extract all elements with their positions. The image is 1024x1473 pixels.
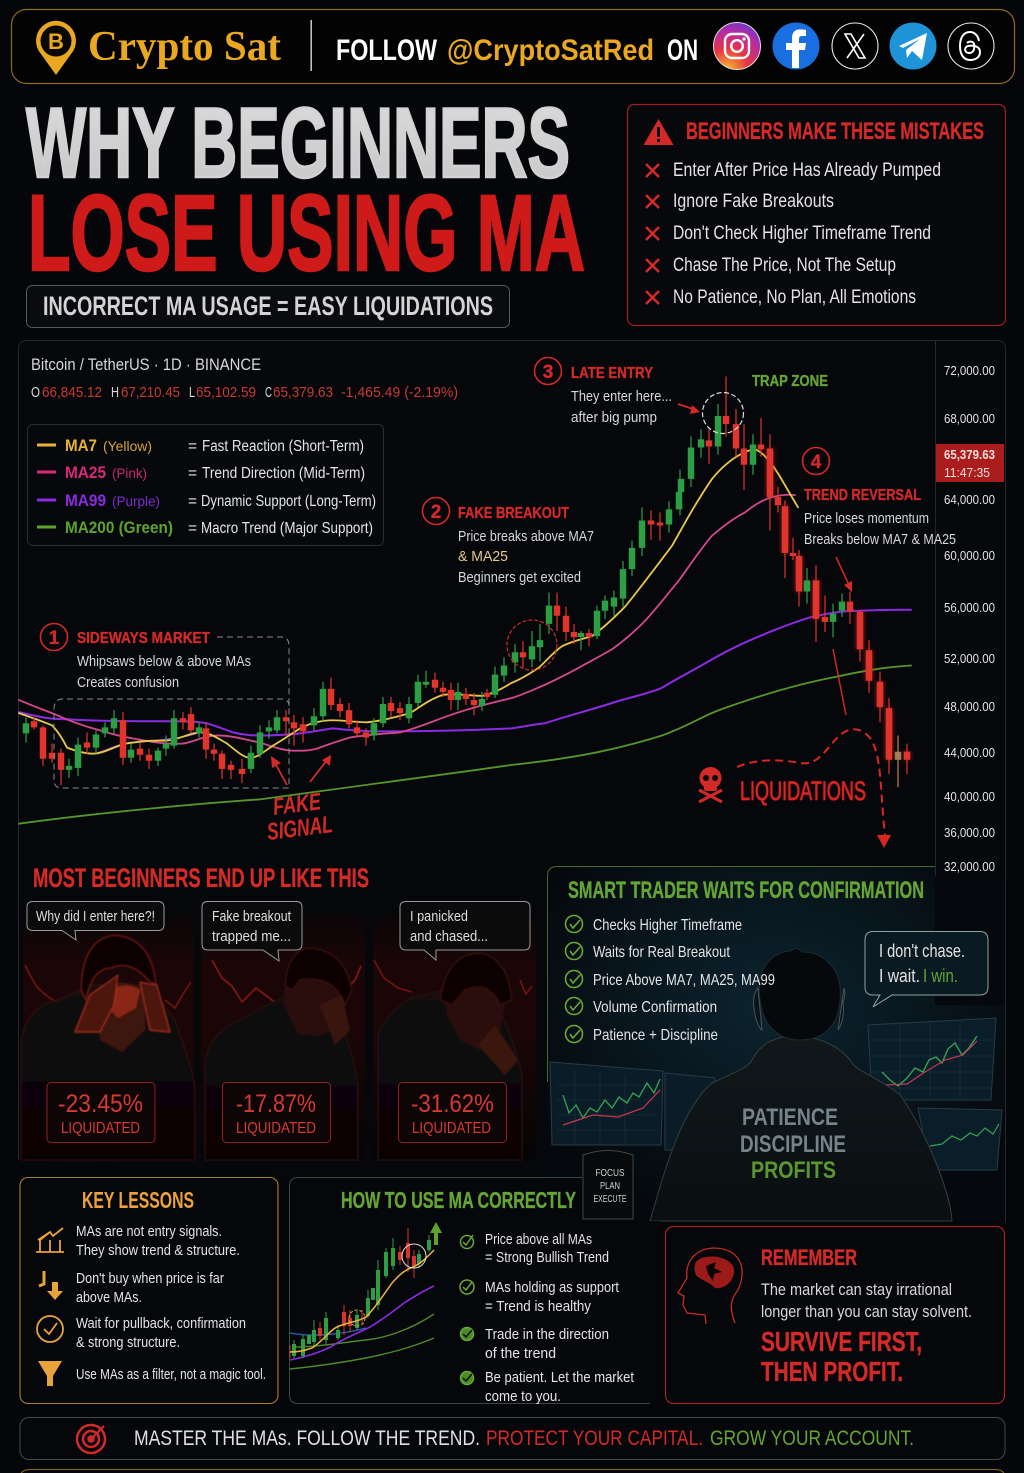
chart header: -1,465.49 (-2.19%) bbox=[341, 384, 458, 401]
arrow to entry bbox=[678, 404, 693, 409]
portrait 2 bbox=[201, 915, 365, 1160]
panel: how to use MA bbox=[290, 1178, 660, 1405]
how to checklist: Be patient. Let the market bbox=[485, 1370, 634, 1386]
arrow to breakdown bbox=[836, 557, 849, 585]
panel: price chart bbox=[18, 340, 1006, 1222]
lessons text: Don't buy when price is far bbox=[76, 1271, 224, 1287]
icon: skull bbox=[699, 767, 722, 802]
mug: FOCUS bbox=[596, 1167, 624, 1179]
annotation 4: trend reversal: TREND REVERSAL bbox=[804, 487, 921, 504]
legend: Trend Direction (Mid-Term) bbox=[202, 465, 365, 482]
annotation 4: trend reversal bbox=[802, 448, 956, 592]
icon: instagram bbox=[714, 22, 760, 70]
footer banner: PROTECT YOUR CAPITAL. bbox=[486, 1427, 703, 1450]
fake signal note with arrows: FAKE bbox=[271, 788, 323, 821]
icon: funnel bbox=[38, 1361, 62, 1386]
annotation 1: sideways market: Whipsaws below & above MAs bbox=[77, 653, 251, 670]
follow call to action: ON bbox=[667, 34, 698, 67]
annotation 2: fake breakout: 2 bbox=[431, 502, 441, 523]
legend: MA7 bbox=[65, 436, 97, 455]
speech bubble 2: trapped me... bbox=[212, 928, 291, 945]
mini uptrend chart bbox=[290, 1222, 442, 1369]
key lessons heading: KEY LESSONS bbox=[82, 1187, 194, 1213]
icon: head with brain bbox=[678, 1248, 742, 1324]
lessons text: They show trend & structure. bbox=[76, 1243, 240, 1259]
hoodie text: PATIENCE bbox=[742, 1104, 838, 1131]
icon: telegram bbox=[890, 22, 936, 70]
price axis: 64,000.00 bbox=[944, 492, 995, 507]
annotation 1: sideways market: SIDEWAYS MARKET bbox=[77, 630, 210, 647]
portrait 3 bbox=[373, 915, 536, 1160]
panel: remember: THEN PROFIT. bbox=[761, 1356, 903, 1387]
price axis: 48,000.00 bbox=[944, 699, 995, 714]
legend: = bbox=[188, 520, 197, 537]
confirmation checklist bbox=[566, 916, 775, 1044]
title: LOSE USING MA bbox=[28, 172, 585, 293]
lessons text: Use MAs as a filter, not a magic tool. bbox=[76, 1367, 266, 1383]
legend: Macro Trend (Major Support) bbox=[201, 520, 373, 537]
icon: growth chart bbox=[36, 1228, 64, 1252]
candlesticks bbox=[26, 377, 907, 787]
chart header: Bitcoin / TetherUS · 1D · BINANCE bbox=[31, 355, 261, 374]
how to checklist: = Strong Bullish Trend bbox=[485, 1250, 609, 1266]
footer banner: GROW YOUR ACCOUNT. bbox=[710, 1427, 914, 1450]
current price tag: 65,379.63 bbox=[944, 447, 995, 462]
hoodie text bbox=[740, 1104, 846, 1184]
loss badge 3: LIQUIDATED bbox=[412, 1120, 491, 1137]
how to checklist: of the trend bbox=[485, 1346, 556, 1362]
title bbox=[26, 87, 585, 293]
speech bubble: I don't chase: I don't chase. bbox=[879, 941, 965, 961]
price axis: 44,000.00 bbox=[944, 745, 995, 760]
left monitors bbox=[550, 1062, 715, 1150]
green candles bbox=[26, 404, 842, 778]
legend: = bbox=[188, 438, 197, 455]
speech bubble 1: Why did I enter here?! bbox=[36, 908, 155, 925]
follow call to action: @CryptoSatRed bbox=[447, 34, 654, 67]
annotation 4: trend reversal: 4 bbox=[811, 452, 822, 473]
chart header: 65,102.59 bbox=[196, 384, 256, 401]
subtitle box: INCORRECT MA USAGE = EASY LIQUIDATIONS bbox=[43, 291, 493, 321]
chart header bbox=[31, 355, 458, 401]
legend bbox=[28, 424, 384, 546]
annotation 4: trend reversal: Price loses momentum bbox=[804, 510, 929, 527]
mistakes list bbox=[646, 160, 941, 308]
icon: x bbox=[832, 23, 878, 69]
portrait 1 bbox=[21, 915, 195, 1160]
mistakes list: Chase The Price, Not The Setup bbox=[673, 255, 896, 276]
icon: facebook bbox=[772, 22, 820, 70]
confirmation checklist: Waits for Real Breakout bbox=[593, 944, 730, 961]
speech bubble: I don't chase: I win. bbox=[923, 966, 958, 986]
how to checklist: Price above all MAs bbox=[485, 1232, 592, 1248]
footer banner: MASTER THE MAs. FOLLOW THE TREND. bbox=[134, 1427, 480, 1450]
price axis: 60,000.00 bbox=[944, 548, 995, 563]
icon: target bbox=[77, 1425, 105, 1453]
dashed crash arrow bbox=[737, 729, 885, 836]
loss badge 3: -31.62% bbox=[411, 1090, 494, 1118]
speech bubble 2: Fake breakout bbox=[212, 908, 292, 925]
legend: (Pink) bbox=[112, 465, 147, 481]
annotation 3: late entry: after big pump bbox=[571, 409, 657, 426]
brand name: Crypto Sat bbox=[88, 24, 281, 70]
speech bubble 3 bbox=[400, 902, 530, 960]
fake signal note with arrows bbox=[265, 755, 334, 846]
chart header: O bbox=[31, 384, 40, 401]
annotation 1: sideways market: 1 bbox=[49, 628, 60, 649]
mug bbox=[583, 1150, 633, 1219]
panel: remember: longer than you can stay solvent. bbox=[761, 1302, 972, 1321]
fake signal note with arrows: SIGNAL bbox=[265, 811, 334, 846]
liquidations callout bbox=[699, 649, 891, 848]
annotation 2: fake breakout: Price breaks above MA7 bbox=[458, 528, 594, 545]
header bar bbox=[12, 10, 1014, 84]
confirmation checklist: Volume Confirmation bbox=[593, 999, 717, 1016]
annotation 3: late entry: They enter here... bbox=[571, 388, 672, 405]
confirmation checklist: Checks Higher Timeframe bbox=[593, 917, 742, 934]
loss badge 1 bbox=[47, 1082, 155, 1142]
trap zone label: TRAP ZONE bbox=[752, 373, 828, 390]
hoodie text: PROFITS bbox=[751, 1157, 836, 1184]
loss badge 2 bbox=[222, 1082, 330, 1142]
how to heading: HOW TO USE MA CORRECTLY bbox=[341, 1187, 576, 1213]
annotation 2: fake breakout: Beginners get excited bbox=[458, 569, 581, 586]
panel: beginners results bbox=[21, 863, 536, 1160]
loss badge 1: -23.45% bbox=[58, 1090, 143, 1118]
speech bubble 3: I panicked bbox=[410, 908, 468, 925]
title: WHY BEGINNERS bbox=[26, 87, 570, 198]
price axis: 56,000.00 bbox=[944, 600, 995, 615]
legend: Fast Reaction (Short-Term) bbox=[202, 438, 364, 455]
legend: Dynamic Support (Long-Term) bbox=[201, 493, 376, 510]
annotation 1: sideways market: Creates confusion bbox=[77, 674, 179, 691]
speech bubble: I don't chase: I wait. bbox=[879, 966, 920, 986]
subtitle box bbox=[26, 286, 510, 328]
lessons text: Wait for pullback, confirmation bbox=[76, 1316, 246, 1332]
panel: remember: SURVIVE FIRST, bbox=[761, 1326, 922, 1357]
chart header: 66,845.12 bbox=[42, 384, 102, 401]
loss badge 2: -17.87% bbox=[236, 1090, 316, 1118]
confirmation checklist: Price Above MA7, MA25, MA99 bbox=[593, 972, 775, 989]
how to checklist: Trade in the direction bbox=[485, 1327, 609, 1343]
icon: threads bbox=[948, 23, 994, 69]
price axis: 52,000.00 bbox=[944, 651, 995, 666]
red candle glow bbox=[770, 448, 907, 760]
liquidations callout: LIQUIDATIONS bbox=[740, 776, 866, 806]
how to checklist bbox=[460, 1232, 634, 1405]
price axis: 40,000.00 bbox=[944, 789, 995, 804]
current price tag bbox=[936, 444, 1004, 482]
footer banner bbox=[20, 1418, 1005, 1460]
lessons text: MAs are not entry signals. bbox=[76, 1224, 222, 1240]
how to checklist: MAs holding as support bbox=[485, 1280, 619, 1296]
speech bubble 2 bbox=[202, 902, 302, 961]
panel: key lessons bbox=[20, 1178, 278, 1404]
panel: remember: REMEMBER bbox=[761, 1245, 857, 1270]
lessons text: & strong structure. bbox=[76, 1335, 180, 1351]
icon: warning triangle bbox=[644, 119, 674, 145]
panel: smart trader bbox=[547, 866, 1005, 1221]
how to checklist: come to you. bbox=[485, 1389, 561, 1405]
trader silhouette bbox=[650, 948, 952, 1221]
section heading: MOST BEGINNERS END UP LIKE THIS bbox=[33, 863, 369, 893]
panel: remember bbox=[666, 1226, 1004, 1404]
chart header: H bbox=[111, 384, 119, 401]
annotation 3: late entry: LATE ENTRY bbox=[571, 365, 653, 382]
annotation 2: fake breakout bbox=[422, 498, 594, 670]
red candles bbox=[34, 377, 907, 787]
mistakes list: No Patience, No Plan, All Emotions bbox=[673, 287, 916, 308]
price axis: 36,000.00 bbox=[944, 825, 995, 840]
hoodie text: DISCIPLINE bbox=[740, 1131, 846, 1158]
price axis: 68,000.00 bbox=[944, 411, 995, 426]
right monitors bbox=[868, 1018, 1002, 1170]
speech bubble 3: and chased... bbox=[410, 928, 488, 945]
current price tag: 11:47:35 bbox=[944, 465, 990, 480]
mistakes list: Don't Check Higher Timeframe Trend bbox=[673, 223, 931, 244]
icon: bitcoin location pin logo bbox=[36, 21, 76, 75]
annotation 2: fake breakout: FAKE BREAKOUT bbox=[458, 505, 569, 522]
loss badge 3 bbox=[398, 1082, 506, 1142]
price axis bbox=[944, 363, 995, 874]
legend: MA25 bbox=[65, 463, 106, 482]
moving average lines bbox=[19, 450, 911, 824]
price axis: 32,000.00 bbox=[944, 859, 995, 874]
icon: bitcoin location pin logo: B bbox=[48, 29, 64, 54]
price axis: 72,000.00 bbox=[944, 363, 995, 378]
chart header: C bbox=[265, 384, 272, 401]
follow call to action: FOLLOW bbox=[336, 34, 438, 67]
chart header: 67,210.45 bbox=[121, 384, 180, 401]
chart header: L bbox=[189, 384, 195, 401]
legend: MA200 (Green) bbox=[65, 518, 173, 537]
mistakes list: Enter After Price Has Already Pumped bbox=[673, 160, 941, 181]
annotation 3: late entry: 3 bbox=[543, 362, 553, 383]
speech bubble: I don't chase bbox=[865, 932, 988, 1007]
legend: (Purple) bbox=[112, 493, 160, 509]
legend: (Yellow) bbox=[103, 438, 152, 454]
icon: check circle bbox=[37, 1316, 63, 1342]
icon: down arrows bbox=[39, 1271, 63, 1300]
liquidations callout: LIQUIDATIONS bbox=[740, 776, 866, 806]
chart header: 65,379.63 bbox=[273, 384, 333, 401]
annotation 2: fake breakout: & MA25 bbox=[458, 548, 508, 565]
loss badge 1: LIQUIDATED bbox=[61, 1120, 140, 1137]
legend: = bbox=[188, 465, 197, 482]
annotation 3: late entry bbox=[534, 358, 828, 434]
loss badge 2: LIQUIDATED bbox=[236, 1120, 316, 1137]
confirmation checklist: Patience + Discipline bbox=[593, 1027, 718, 1044]
panel: beginner mistakes bbox=[628, 104, 1006, 326]
panel: remember: The market can stay irrational bbox=[761, 1280, 952, 1299]
speech bubble 1 bbox=[27, 902, 164, 940]
annotation 1: sideways market bbox=[40, 624, 289, 788]
legend: = bbox=[188, 493, 197, 510]
lessons text: above MAs. bbox=[76, 1290, 142, 1306]
lessons text bbox=[76, 1224, 266, 1383]
mug: EXECUTE bbox=[594, 1193, 626, 1205]
how to checklist: = Trend is healthy bbox=[485, 1299, 592, 1315]
annotation 4: trend reversal: Breaks below MA7 & MA25 bbox=[804, 531, 956, 548]
legend: MA99 bbox=[65, 491, 106, 510]
mug: PLAN bbox=[600, 1180, 620, 1192]
mistakes list: Ignore Fake Breakouts bbox=[673, 191, 834, 212]
